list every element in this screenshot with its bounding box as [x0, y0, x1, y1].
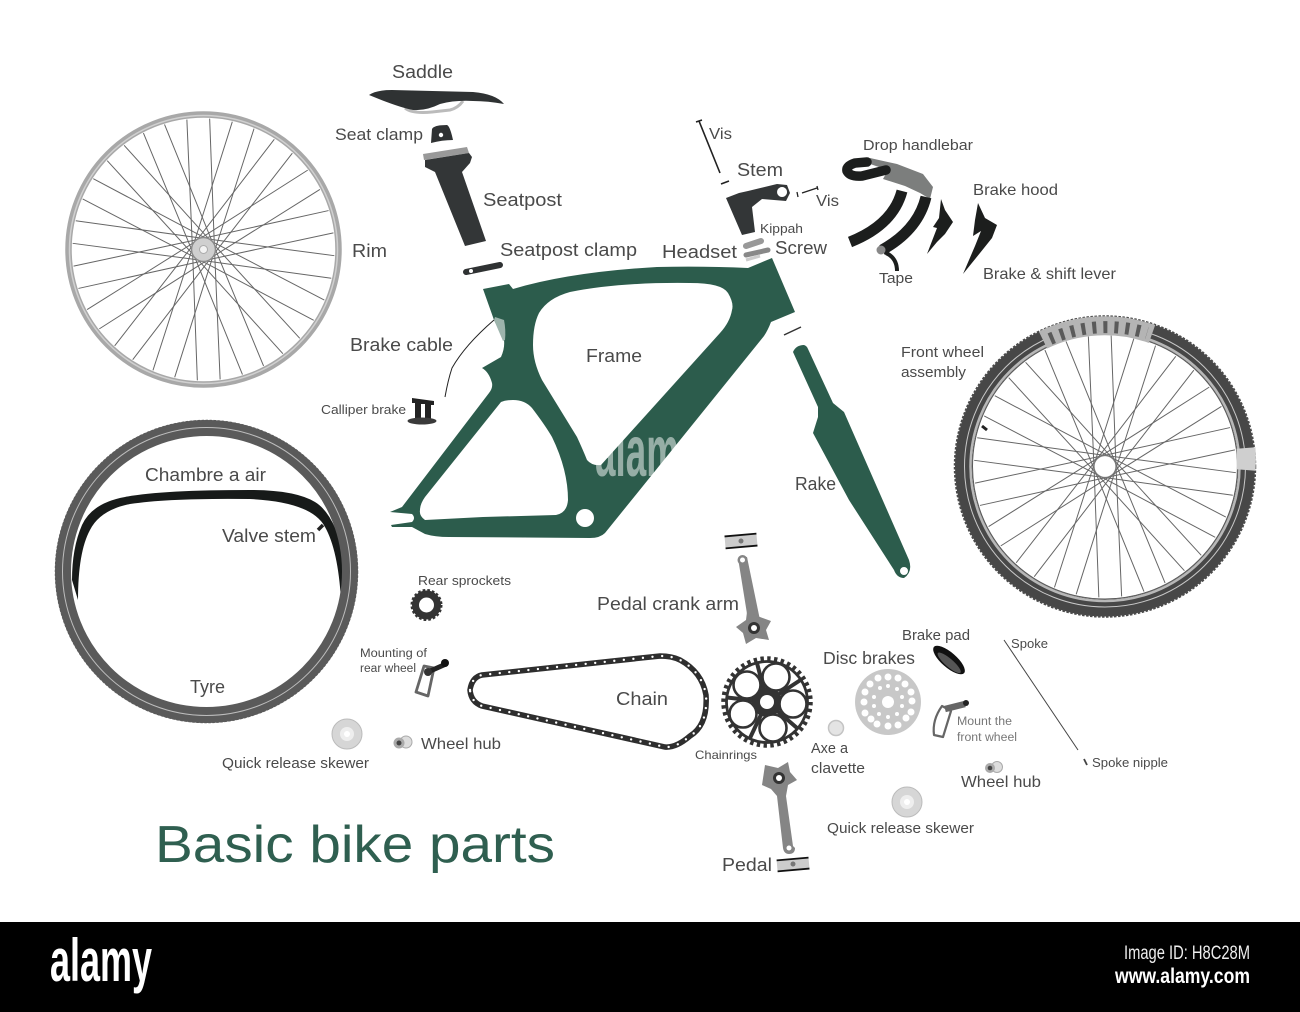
label: Quick release skewer (front): Quick release skewer	[827, 821, 974, 837]
label: Saddle: Saddle	[392, 62, 453, 82]
label: Axe a clavette: clavette	[811, 761, 865, 777]
label: Pedal crank arm: Pedal crank arm	[597, 594, 739, 614]
screw beside stem	[797, 186, 818, 197]
label: Rim: Rim	[352, 240, 387, 261]
spoke nipple	[1084, 759, 1087, 765]
chainrings	[724, 658, 810, 746]
label: Seatpost clamp: Seatpost clamp	[500, 239, 637, 260]
label: Chainrings: Chainrings	[695, 748, 757, 762]
tyre	[56, 421, 357, 722]
label: Tyre: Tyre	[190, 677, 225, 697]
steerer ring	[784, 327, 801, 335]
label: Mounting of rear wheel: rear wheel	[360, 663, 416, 675]
quick release skewer front	[892, 787, 922, 817]
chain	[470, 656, 706, 747]
watermark on tyre	[1043, 326, 1152, 340]
valve stem	[318, 525, 323, 530]
label: Stem: Stem	[737, 160, 783, 180]
label: Calliper brake: Calliper brake	[321, 402, 406, 417]
label: Rake: Rake	[795, 474, 836, 494]
label: Seatpost: Seatpost	[483, 189, 562, 210]
tape	[886, 253, 897, 271]
disc brakes	[855, 669, 921, 735]
alamy logo: alamy	[50, 927, 152, 994]
label: Spoke: Spoke	[1011, 637, 1048, 651]
quick release skewer rear	[332, 719, 362, 749]
label: Brake cable: Brake cable	[350, 335, 453, 355]
label: Axe a clavette: Axe a	[811, 741, 849, 757]
label: Chambre a air: Chambre a air	[145, 464, 266, 485]
label: Wheel hub (rear): Wheel hub	[421, 736, 501, 753]
pedal crank arm	[736, 555, 771, 644]
label: Drop handlebar: Drop handlebar	[863, 137, 973, 154]
label: Valve stem: Valve stem	[222, 526, 316, 546]
brake and shift lever	[963, 203, 997, 274]
seatpost clamp	[466, 265, 500, 273]
label: Disc brakes: Disc brakes	[823, 648, 915, 668]
rake fork	[793, 345, 910, 578]
mount of the front wheel	[934, 700, 969, 737]
label: Vis: Vis	[709, 126, 732, 143]
website: www.alamy.com	[1114, 965, 1250, 988]
inner tube	[72, 490, 349, 600]
brake cable	[445, 320, 494, 397]
calliper brake	[408, 398, 436, 424]
label: Seat clamp: Seat clamp	[335, 126, 423, 144]
wheel hub rear	[394, 736, 412, 748]
label: Kippah: Kippah	[760, 222, 803, 236]
image id: Image ID: H8C28M	[1124, 943, 1250, 964]
top pedal	[725, 534, 757, 548]
saddle	[369, 90, 504, 112]
seat clamp	[431, 125, 453, 143]
label: Frame: Frame	[586, 345, 642, 366]
label: Screw: Screw	[775, 238, 828, 258]
footer bar	[0, 922, 1300, 1012]
title: Basic bike parts	[155, 816, 555, 874]
wheel hub front	[985, 762, 1002, 773]
label: Brake hood: Brake hood	[973, 182, 1058, 199]
seatpost	[423, 147, 486, 246]
label: Headset: Headset	[662, 241, 737, 262]
headset	[746, 241, 768, 260]
label: Chain: Chain	[616, 688, 668, 709]
watermark on frame: alam	[595, 412, 679, 492]
rear sprockets	[412, 590, 441, 620]
label: Front wheel assembly: Front wheel	[901, 344, 984, 361]
label: Spoke nipple: Spoke nipple	[1092, 756, 1168, 770]
bottom crank arm	[762, 762, 797, 854]
label: Brake & shift lever: Brake & shift lever	[983, 266, 1117, 283]
mounting of rear wheel	[416, 659, 449, 696]
axe a clavette	[828, 720, 844, 736]
label: Mounting of rear wheel: Mounting of	[360, 648, 428, 660]
label: Quick release skewer (rear): Quick release skewer	[222, 756, 369, 772]
front wheel assembly	[955, 316, 1255, 616]
label: Pedal: Pedal	[722, 854, 772, 875]
label: Rear sprockets: Rear sprockets	[418, 573, 512, 588]
label: Wheel hub (front): Wheel hub	[961, 774, 1041, 791]
screw above stem	[696, 120, 729, 184]
rear wheel with rim	[68, 114, 339, 385]
brake pad	[929, 641, 969, 679]
drop handlebar	[847, 158, 933, 254]
spoke	[1004, 640, 1078, 750]
label: Vis (right): Vis	[816, 193, 839, 210]
label: Tape: Tape	[879, 271, 913, 287]
label: Front wheel assembly: assembly	[901, 364, 967, 381]
label: Mount the front wheel: front wheel	[957, 732, 1017, 744]
label: Mount the front wheel: Mount the	[957, 716, 1012, 728]
stem	[726, 184, 790, 235]
bottom pedal	[777, 858, 809, 871]
frame	[390, 258, 795, 538]
brake hood	[927, 199, 953, 254]
label: Brake pad: Brake pad	[902, 628, 970, 644]
